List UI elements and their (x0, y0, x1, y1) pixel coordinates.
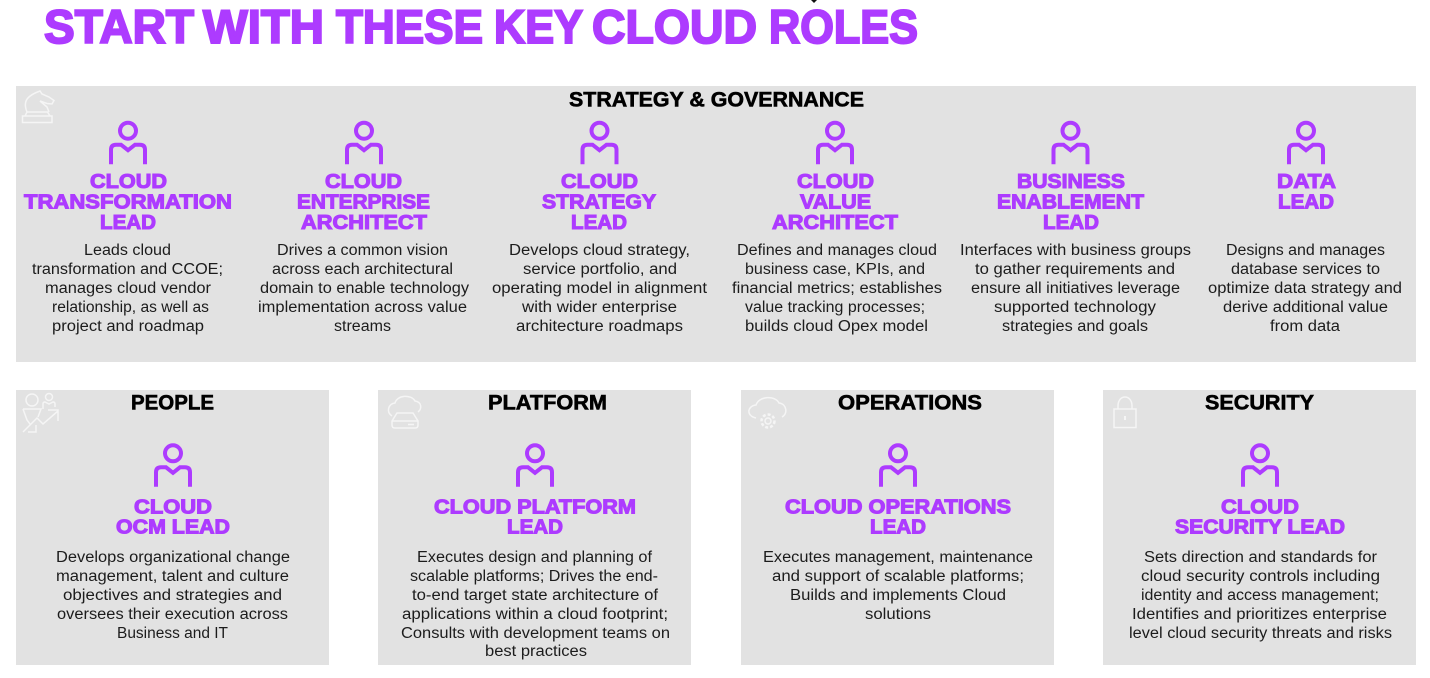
icon: cloud gear (749, 398, 786, 428)
heading: security: SECURITY (1205, 392, 1314, 414)
role: cloud value architect (732, 123, 942, 335)
heading: operations: OPERATIONS (838, 392, 982, 414)
role: business enablement lead: Interfaces with business groups (960, 242, 1191, 259)
title (44, 0, 918, 53)
panel: platform (378, 390, 691, 665)
role: cloud platform lead: Executes design and planning of (417, 549, 653, 566)
panel: operations (741, 390, 1054, 665)
role: cloud platform lead: Consults with development teams on (401, 625, 670, 642)
role: cloud enterprise architect: CLOUD (325, 170, 402, 193)
role: cloud value architect: Defines and manages cloud (737, 242, 937, 259)
role: cloud platform lead: LEAD (507, 516, 563, 538)
role: cloud transformation lead: Leads cloud (84, 242, 171, 259)
role: cloud operations lead: solutions (865, 606, 931, 623)
role: business enablement lead: supported technology (994, 299, 1156, 316)
role: cloud operations lead: Executes management, maintenance (763, 549, 1033, 566)
role: data lead: LEAD (1278, 190, 1334, 214)
role: cloud value architect: ARCHITECT (772, 211, 899, 234)
role: cloud value architect: financial metrics; establishes (732, 280, 942, 297)
role: cloud transformation lead (24, 123, 232, 335)
role: data lead: optimize data strategy and (1208, 280, 1402, 297)
role: cloud strategy lead: Develops cloud strategy, (509, 242, 690, 259)
role: cloud operations lead: LEAD (870, 516, 926, 538)
role: cloud enterprise architect: Drives a common vision (277, 242, 448, 259)
role: cloud enterprise architect: domain to enable technology (260, 280, 469, 297)
role: cloud enterprise architect: across each architectural (272, 261, 453, 278)
role: business enablement lead: strategies and goals (1002, 318, 1148, 335)
role: cloud enterprise architect: streams (334, 318, 391, 335)
panel: security (1103, 390, 1416, 665)
role: data lead: database services to (1231, 261, 1380, 278)
role: business enablement lead: LEAD (1043, 211, 1099, 234)
role: cloud value architect: value tracking processes; (745, 299, 925, 316)
role: cloud operations lead: Builds and implements Cloud (790, 587, 1006, 604)
role: cloud transformation lead: manages cloud vendor (45, 280, 211, 297)
title: CLOUD (592, 0, 757, 53)
icon: cloud server (388, 396, 421, 428)
role: cloud operations lead: CLOUD OPERATIONS (785, 496, 1011, 518)
role: cloud enterprise architect: ARCHITECT (301, 211, 428, 234)
role: cloud ocm lead: objectives and strategies and (63, 587, 282, 604)
role: cloud security lead: Identifies and prioritizes enterprise (1132, 606, 1387, 623)
role: data lead: DATA (1277, 170, 1336, 193)
role: cloud ocm lead: OCM LEAD (116, 516, 230, 538)
role: business enablement lead: ensure all initiatives leverage (971, 280, 1180, 297)
role: cloud platform lead: scalable platforms; Drives the end- (410, 568, 658, 585)
role: business enablement lead: BUSINESS (1017, 170, 1125, 193)
role: cloud enterprise architect: implementation across value (258, 299, 467, 316)
role: cloud strategy lead (492, 123, 708, 335)
title: WITH (203, 0, 324, 53)
role: cloud transformation lead: LEAD (100, 211, 156, 234)
role: cloud strategy lead: architecture roadmaps (516, 318, 683, 335)
role: cloud strategy lead: with wider enterprise (521, 299, 677, 316)
role: cloud transformation lead: project and roadmap (52, 318, 204, 335)
title: START (44, 0, 194, 53)
role: data lead: Designs and manages (1226, 242, 1385, 259)
role: cloud operations lead: and support of scalable platforms; (772, 568, 1024, 585)
role: cloud platform lead: best practices (485, 643, 587, 660)
role: cloud platform lead (401, 445, 670, 660)
role: cloud security lead: SECURITY LEAD (1175, 516, 1345, 538)
title: KEY (494, 0, 583, 53)
role: cloud operations lead (763, 445, 1033, 623)
role: cloud security lead: CLOUD (1221, 496, 1299, 518)
role: cloud value architect: CLOUD (797, 170, 874, 193)
title: THESE (336, 0, 483, 53)
role: data lead: derive additional value (1223, 299, 1388, 316)
role: cloud strategy lead: CLOUD (561, 170, 638, 193)
role: cloud enterprise architect: ENTERPRISE (297, 190, 430, 214)
panel: strategy and governance (16, 86, 1416, 362)
icon: padlock (1114, 397, 1136, 428)
role: cloud transformation lead: transformation and CCOE; (32, 261, 223, 278)
icon: people and growth arrow (23, 394, 58, 432)
role: cloud transformation lead: TRANSFORMATION (24, 190, 232, 214)
role: data lead (1208, 123, 1402, 335)
role: cloud value architect: builds cloud Opex model (745, 318, 928, 335)
role: cloud security lead: cloud security controls including (1141, 568, 1380, 585)
role: cloud ocm lead (56, 445, 290, 642)
heading: platform: PLATFORM (488, 392, 607, 414)
role: cloud security lead: identity and access management; (1141, 587, 1379, 604)
role: cloud value architect: VALUE (800, 190, 871, 214)
role: cloud platform lead: CLOUD PLATFORM (434, 496, 636, 518)
role: cloud strategy lead: service portfolio, and (523, 261, 677, 278)
role: cloud strategy lead: STRATEGY (542, 190, 656, 214)
role: cloud value architect: business case, KPIs, and (745, 261, 925, 278)
role: cloud ocm lead: CLOUD (134, 496, 212, 518)
role: cloud platform lead: to-end target state architecture of (412, 587, 659, 604)
role: cloud ocm lead: oversees their execution across (57, 606, 288, 623)
role: cloud enterprise architect (258, 123, 469, 335)
role: cloud security lead: Sets direction and standards for (1144, 549, 1377, 566)
title: ROLES (769, 0, 918, 53)
role: cloud strategy lead: LEAD (571, 211, 627, 234)
role: cloud transformation lead: CLOUD (90, 170, 167, 193)
icon: chess knight (22, 91, 54, 122)
role: cloud ocm lead: Develops organizational change (56, 549, 290, 566)
role: business enablement lead: ENABLEMENT (997, 190, 1144, 214)
role: cloud ocm lead: management, talent and culture (56, 568, 289, 585)
role: cloud ocm lead: Business and IT (117, 625, 229, 642)
role: cloud security lead: level cloud security threats and risks (1129, 625, 1392, 642)
panel: people (16, 390, 329, 665)
heading: people: PEOPLE (131, 392, 214, 414)
role: business enablement lead (960, 123, 1191, 335)
role: cloud strategy lead: operating model in alignment (492, 280, 708, 297)
role: cloud platform lead: applications within a cloud footprint; (402, 606, 668, 623)
role: cloud transformation lead: relationship, as well as (52, 299, 209, 316)
role: cloud security lead (1129, 445, 1392, 642)
role: business enablement lead: to gather requirements and (975, 261, 1175, 278)
role: data lead: from data (1270, 318, 1340, 335)
heading: strategy and governance: STRATEGY & GOVERNANCE (569, 88, 864, 112)
